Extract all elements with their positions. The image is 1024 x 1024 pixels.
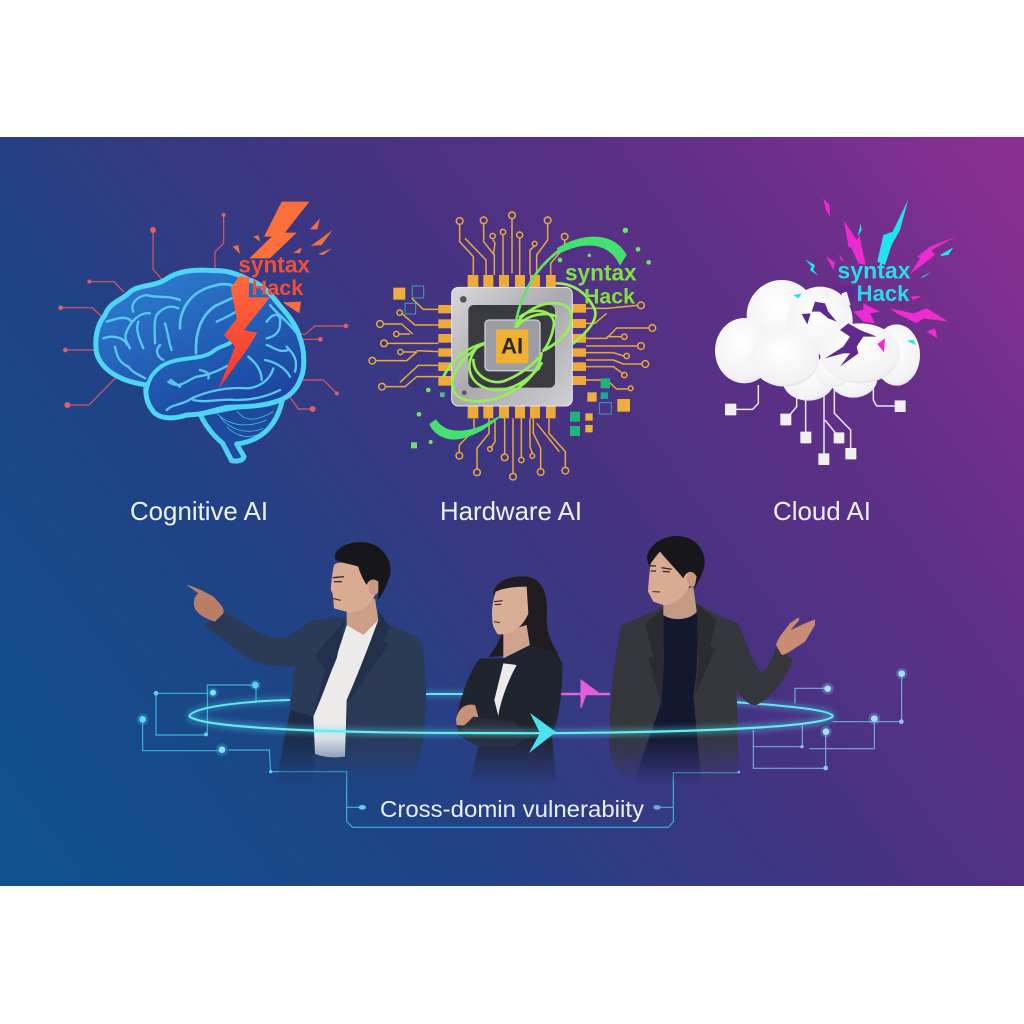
lightning bolt lower	[218, 276, 270, 389]
open hand	[776, 617, 815, 655]
chip core	[485, 320, 540, 371]
white cloud shards	[822, 288, 851, 307]
cloud trace terminals	[725, 400, 906, 465]
pink bolts	[823, 198, 956, 352]
eyes and mouth	[649, 566, 672, 592]
component squares	[393, 286, 630, 436]
lightning bolt upper	[249, 202, 309, 258]
hair	[335, 542, 391, 601]
jacket	[456, 645, 562, 790]
icon: Cloud AI under attack	[715, 198, 956, 465]
shirt	[494, 663, 517, 716]
green orbit swirls	[443, 250, 595, 401]
person: man pointing	[187, 542, 426, 790]
person: woman with crossed arms	[456, 576, 562, 790]
label: syntax Hack	[565, 260, 637, 308]
label: syntax Hack: syntax	[238, 252, 310, 278]
cloud traces	[731, 385, 900, 459]
green crescent bottom	[429, 413, 504, 439]
neck	[663, 587, 697, 619]
brain sulci	[103, 284, 297, 410]
bolt shards	[233, 218, 333, 313]
right circuit nodes	[800, 668, 907, 770]
label: syntax Hack: syntax	[837, 257, 911, 283]
label: syntax Hack: Hack	[584, 284, 635, 308]
label: Cloud AI: Cloud AI	[773, 496, 871, 526]
icon: Cognitive AI brain under attack	[58, 202, 348, 461]
neck	[347, 598, 378, 635]
label: syntax Hack: syntax	[565, 260, 637, 286]
hair	[488, 576, 558, 657]
brain outline	[96, 270, 304, 418]
left circuit network	[137, 680, 740, 827]
jacket shade	[281, 710, 315, 760]
green particles	[411, 228, 651, 448]
label: syntax Hack: Hack	[252, 275, 304, 300]
icon: Hardware AI chip under attack	[369, 212, 656, 480]
person: man with open hand	[609, 536, 815, 783]
neck	[503, 625, 530, 658]
cerebellum folds	[217, 411, 273, 437]
lapels	[645, 604, 717, 707]
jacket	[609, 603, 793, 783]
ear	[368, 580, 378, 595]
brain circuit lines	[61, 215, 346, 409]
chip screws	[460, 296, 467, 395]
crossed arm hand	[456, 705, 478, 726]
ear	[687, 570, 697, 587]
ring back arc	[189, 694, 833, 716]
cerebellum and stem	[200, 398, 283, 461]
lapel right	[347, 612, 390, 705]
brain circuit nodes	[58, 213, 348, 412]
cyan arrow	[529, 713, 556, 753]
chip pads	[438, 275, 586, 418]
face	[648, 552, 693, 605]
cloud puffs	[715, 280, 920, 401]
face	[331, 562, 380, 613]
crossed sleeve	[460, 717, 530, 747]
green crescent top	[557, 237, 627, 266]
hair	[647, 536, 705, 590]
label: Hardware AI: Hardware AI	[440, 496, 582, 526]
chip traces	[376, 219, 649, 473]
jacket	[205, 612, 426, 790]
pink arrow	[557, 680, 610, 708]
cloud cracks	[802, 285, 877, 367]
pointing hand	[187, 585, 224, 622]
caption: Cross-domin vulnerabiity: Cross-domin vulnerabiity	[380, 796, 645, 822]
label: syntax Hack	[837, 257, 911, 306]
label: syntax Hack	[238, 252, 310, 300]
AI label: AI	[501, 334, 523, 359]
shirt	[313, 620, 378, 757]
label: syntax Hack: Hack	[857, 281, 910, 306]
face	[492, 587, 528, 634]
ring front arc	[189, 716, 833, 733]
left circuit nodes	[137, 680, 740, 810]
chip dark inner	[468, 305, 555, 388]
trace terminals	[369, 212, 656, 480]
cyan bolts	[793, 199, 953, 345]
lapel left	[313, 620, 345, 715]
AI die	[496, 329, 528, 363]
t-shirt	[638, 613, 700, 772]
gradient banner panel	[0, 137, 1024, 886]
label: Cognitive AI: Cognitive AI	[130, 496, 268, 526]
right circuit network	[753, 668, 907, 770]
eyes and mouth	[333, 577, 344, 600]
chip body	[452, 287, 572, 406]
eyes and mouth	[494, 601, 503, 623]
